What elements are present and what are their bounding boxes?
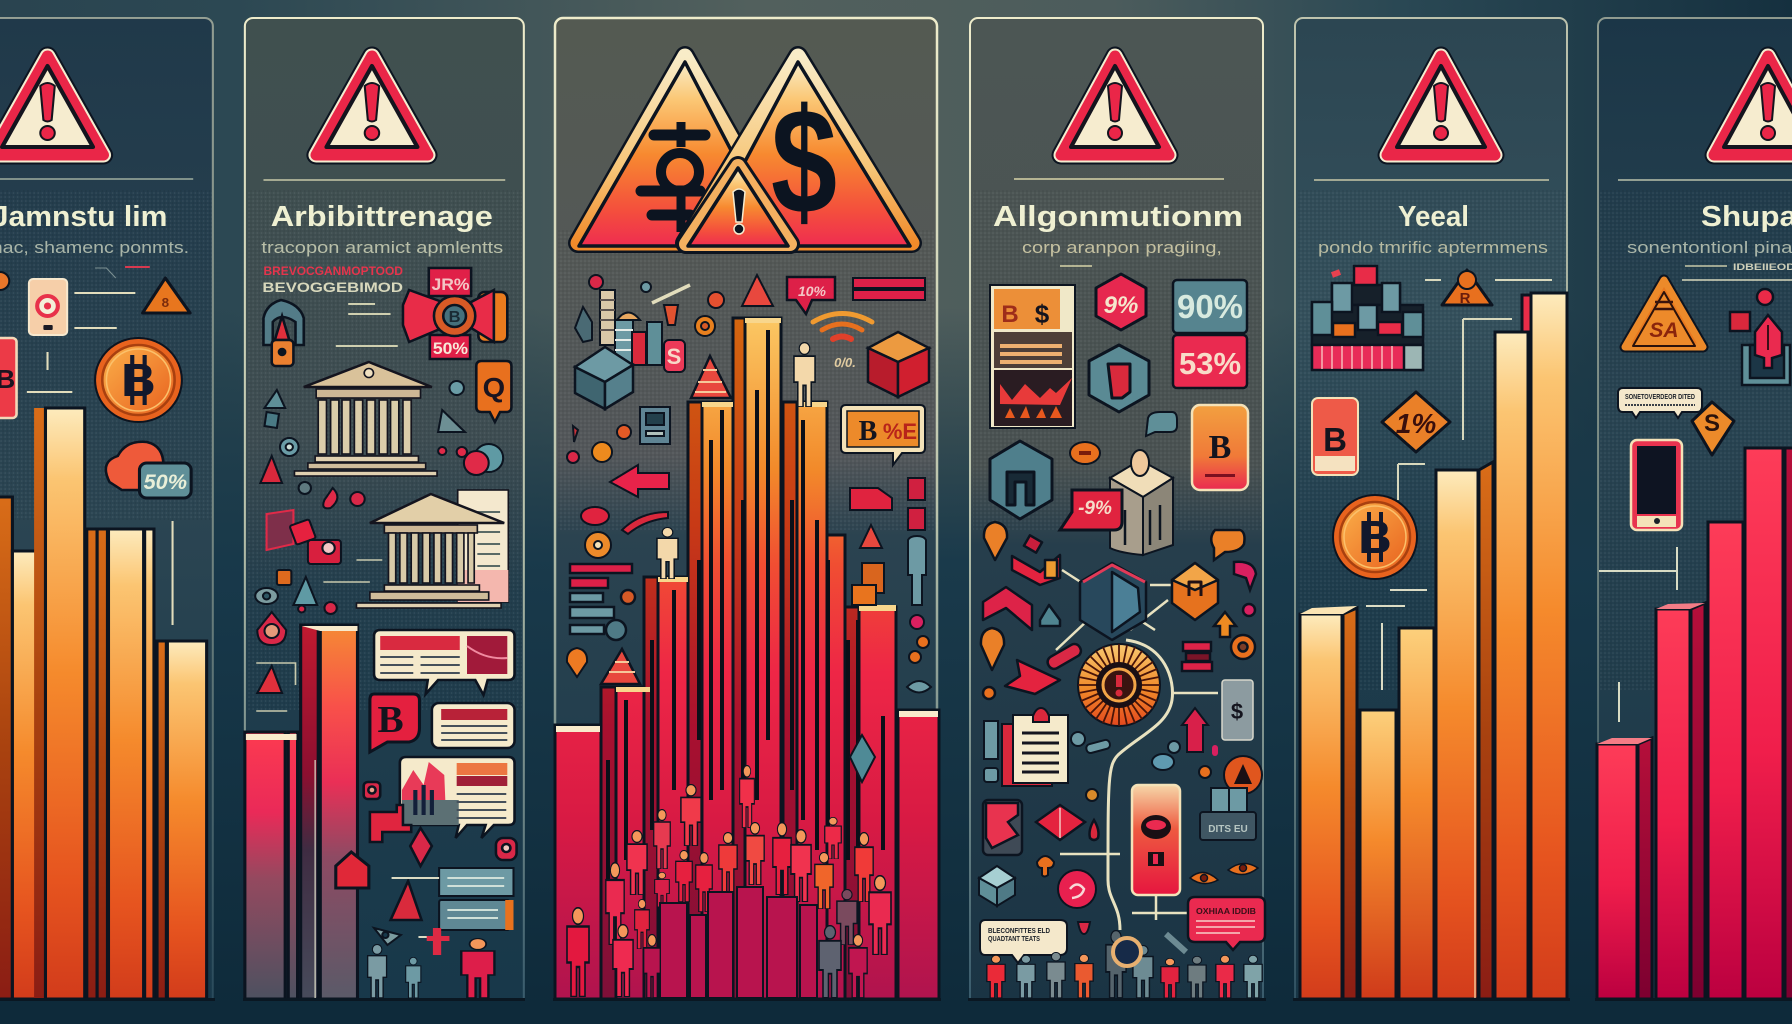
card: price report: B bbox=[1001, 301, 1019, 328]
icon: dark teal hexagon bbox=[990, 441, 1052, 519]
panel: Arbibittrenage bbox=[245, 18, 524, 1013]
panel: Shupa bbox=[1597, 18, 1792, 1013]
small marks bbox=[1366, 590, 1427, 690]
speech: cream note bbox=[1618, 388, 1702, 418]
heading: Yeeal bbox=[1398, 201, 1469, 233]
panel: left cut-off risk bbox=[0, 18, 213, 1013]
bar chart: orange bars bbox=[0, 408, 207, 999]
icon: warning triangle bbox=[0, 56, 103, 155]
icon: orange B speech bbox=[841, 405, 925, 465]
icon: warning triangle bbox=[1061, 56, 1169, 155]
speech: cream note: SONETOVERDEOR DITED bbox=[1625, 394, 1695, 401]
icon: orange warning triangle bbox=[1442, 270, 1492, 307]
card: 53 percent bbox=[1173, 335, 1247, 388]
icon: red cube bbox=[868, 332, 929, 397]
card: price report: $ bbox=[1035, 299, 1050, 329]
icons: left curve, coin bbox=[581, 507, 668, 558]
icon: red percent speech bbox=[1060, 490, 1122, 530]
bottom crimson blocks bbox=[660, 887, 817, 998]
bar tops bbox=[556, 318, 938, 732]
icon: bitcoin coin: B bbox=[1358, 511, 1392, 563]
small label: 0/0. bbox=[834, 355, 856, 370]
icon: grey dollar phone: $ bbox=[1231, 699, 1243, 724]
icon: magnifier bbox=[1113, 934, 1186, 966]
icons: key, coins and stacks bbox=[575, 275, 690, 372]
icon: orange B phone bbox=[1192, 405, 1248, 490]
icon: orange triangle bbox=[143, 278, 190, 313]
icon: warning triangle bbox=[316, 56, 428, 155]
icon: orange round badge bbox=[1224, 756, 1262, 794]
panel: central dollar warning bbox=[555, 18, 939, 1013]
icon: right warning triangle with dollar: $ bbox=[771, 77, 837, 245]
icons: right side marks bbox=[850, 525, 931, 782]
icon: orange hexagon bbox=[1172, 563, 1218, 620]
icon: block stack bbox=[1312, 266, 1423, 370]
icon: orange warning triangle: R bbox=[1460, 290, 1471, 307]
speech: cream note: QUADTANT TEATS bbox=[988, 934, 1040, 943]
icon: cloud with 50 percent badge: 50% bbox=[144, 470, 187, 494]
icon: dark phone bbox=[1631, 440, 1682, 530]
icon: bitcoin bundle with percent tags bbox=[403, 268, 507, 359]
speech card: chart report bbox=[374, 630, 515, 695]
icon: orange warning sign bbox=[1625, 280, 1703, 347]
panel: Allgonmutionm bbox=[970, 18, 1265, 1013]
icon: phone bbox=[29, 279, 67, 335]
icon: red striped triangle bbox=[391, 881, 422, 920]
connector lines bbox=[1599, 547, 1677, 722]
icon: orange speech badge bbox=[476, 361, 511, 422]
speech: cream note bbox=[980, 920, 1067, 963]
card: 90 percent bbox=[1173, 280, 1247, 333]
cream caption: BEVOGGEBIMOD bbox=[262, 280, 403, 295]
icon: striped triangles on bars bbox=[601, 356, 731, 684]
panel: Yeeal bbox=[1295, 18, 1567, 1013]
icons: red flat shapes right bbox=[850, 478, 925, 530]
bar chart: central tower bbox=[555, 318, 939, 999]
icons: red blocks and arrow bbox=[364, 782, 517, 866]
icon: glass hexagon bbox=[1080, 563, 1146, 640]
icons: red camera cluster bbox=[255, 510, 341, 645]
icons: red and orange shapes row bbox=[981, 522, 1083, 699]
card: 53 percent: 53% bbox=[1179, 346, 1241, 381]
icon: signal arcs bbox=[813, 314, 872, 339]
icons: red bars bbox=[853, 278, 925, 300]
icon: bank with document bbox=[356, 490, 508, 608]
icon: red percent hexagon bbox=[1096, 274, 1146, 330]
card: price report bbox=[990, 285, 1075, 428]
icon: red phone bbox=[0, 338, 17, 418]
icon: grey dollar phone bbox=[1222, 680, 1253, 740]
icon: red phone B bbox=[1312, 398, 1358, 475]
icon: eye bbox=[374, 928, 401, 945]
subheading: tracopon aramict apmlentts bbox=[261, 237, 504, 257]
card: 90 percent: 90% bbox=[1177, 288, 1243, 325]
icon: orange speech badge: Q bbox=[483, 372, 505, 404]
subheading: pondo tmrific aptermmens bbox=[1318, 238, 1548, 257]
icon: orange triangle: 8 bbox=[162, 295, 169, 310]
subheading: corp aranpon pragiing, bbox=[1022, 238, 1222, 257]
icons: terminal cards bbox=[439, 868, 514, 930]
bar chart: red bars bbox=[1597, 448, 1792, 999]
icon: S shield bbox=[1692, 402, 1734, 455]
icons: right column marks bbox=[1182, 530, 1256, 671]
icon: padlock bbox=[263, 300, 304, 366]
icon: pink marker bbox=[1212, 745, 1218, 756]
icon: bitcoin bundle with percent tags: B bbox=[449, 308, 461, 326]
icon: red shield diagram bbox=[1730, 289, 1790, 385]
icon: cloud with 50 percent badge bbox=[106, 442, 191, 498]
bar chart: pink and grey bars bbox=[245, 625, 357, 999]
small caption: IDBEIIEOD bbox=[1733, 262, 1792, 272]
S mark: S bbox=[667, 344, 681, 369]
icon: striped triangle top bbox=[742, 275, 773, 306]
icon: red striped triangle bbox=[257, 666, 282, 693]
icon: teal box bbox=[575, 347, 633, 409]
heading: Arbibittrenage bbox=[271, 200, 493, 233]
small connector marks bbox=[336, 304, 398, 346]
icon: red left arrow bbox=[610, 465, 669, 497]
floor band bbox=[0, 1000, 1792, 1024]
icon: orange B speech: %E bbox=[883, 419, 917, 444]
path connector bbox=[1056, 570, 1218, 930]
heading: Shupa bbox=[1701, 201, 1792, 233]
person on lower bar bbox=[657, 527, 678, 579]
people bbox=[368, 938, 494, 998]
icon: bitcoin bundle with percent tags: 50% bbox=[433, 338, 468, 358]
connector lines bbox=[27, 267, 150, 392]
red caption: BREVOCGANMOPTOOD bbox=[263, 264, 403, 278]
icon: orange pin bbox=[567, 648, 587, 677]
icon: clipboard bbox=[984, 708, 1068, 786]
chart: horizontal mini bars bbox=[570, 564, 635, 640]
icon: sunburst warning medallion bbox=[1078, 644, 1160, 726]
icons: teal pills and circles bbox=[1071, 732, 1211, 801]
icon: orange diamond percent: 1% bbox=[1396, 408, 1436, 439]
icon: right warning triangle with dollar bbox=[685, 56, 912, 246]
icon: cash register bbox=[1200, 788, 1256, 840]
icon: orange B phone: B bbox=[1209, 429, 1231, 466]
person on tower bbox=[794, 343, 815, 407]
icons: eyes bbox=[1190, 863, 1258, 884]
icon: warning triangle bbox=[1714, 56, 1792, 155]
icon: bank building bbox=[294, 362, 437, 476]
icon: red cross bbox=[427, 928, 449, 955]
icon: orange B speech: B bbox=[859, 416, 877, 447]
icon: red bitcoin speech bubble: B bbox=[377, 700, 404, 741]
icon: teal hexagon with door bbox=[1089, 345, 1149, 412]
icons: bottom left marks bbox=[979, 856, 1096, 934]
bar chart: orange bars bbox=[1300, 293, 1567, 999]
speech: red note: OXHIAA IDDIB bbox=[1196, 907, 1256, 916]
crowd of people bbox=[567, 766, 891, 998]
icon: bitcoin bundle with percent tags: JR% bbox=[431, 274, 469, 294]
speech: cream note: BLECONFITTES ELD bbox=[988, 926, 1050, 935]
speech: red note bbox=[1188, 897, 1265, 950]
icon: left warning triangle with crypto symbol bbox=[578, 56, 790, 246]
icon: teal chat bubble bbox=[1146, 412, 1177, 436]
icon: orange dot bbox=[0, 272, 9, 290]
tower stripes bbox=[608, 330, 883, 880]
icon: S shield: S bbox=[1704, 410, 1720, 437]
icon: small centre warning triangle bbox=[686, 166, 790, 246]
subheading: sonentontionl pinal bbox=[1627, 238, 1792, 257]
icons: small coins and tile bbox=[567, 292, 724, 463]
connector lines bbox=[1398, 280, 1552, 500]
icon: red percent speech bbox=[787, 277, 835, 314]
icon: red smartphone bbox=[1132, 785, 1180, 895]
icon: bitcoin coin: B bbox=[121, 355, 156, 406]
icon: red phone B: B bbox=[1323, 421, 1347, 458]
icon: red gem house bbox=[336, 852, 369, 888]
speech card: mountain chart report bbox=[400, 757, 515, 838]
icon: red percent speech: -9% bbox=[1078, 498, 1112, 519]
icons: small teal and red marks bbox=[260, 381, 503, 508]
icon: orange diamond percent bbox=[1382, 392, 1450, 452]
icon: cash register: DITS EU bbox=[1208, 824, 1248, 835]
icon: red percent speech: 10% bbox=[798, 283, 827, 299]
icon: bitcoin coin bbox=[94, 337, 183, 423]
icon: bitcoin coin bbox=[1332, 494, 1418, 580]
icon: warning triangle bbox=[1387, 56, 1495, 155]
icon: small orange speech bbox=[1070, 442, 1100, 464]
icon: red percent hexagon: 9% bbox=[1104, 292, 1138, 319]
icons: red tile and diamond bbox=[983, 800, 1098, 855]
icon: crimson up arrow bbox=[1182, 708, 1208, 752]
heading: Allgonmutionm bbox=[993, 201, 1243, 233]
speech card: small report bbox=[432, 703, 515, 748]
icon: red bitcoin speech bubble bbox=[370, 694, 419, 752]
icon: tan pedestal bbox=[1110, 450, 1173, 555]
people row bbox=[987, 931, 1262, 998]
icon: orange warning sign: SA bbox=[1649, 319, 1679, 342]
